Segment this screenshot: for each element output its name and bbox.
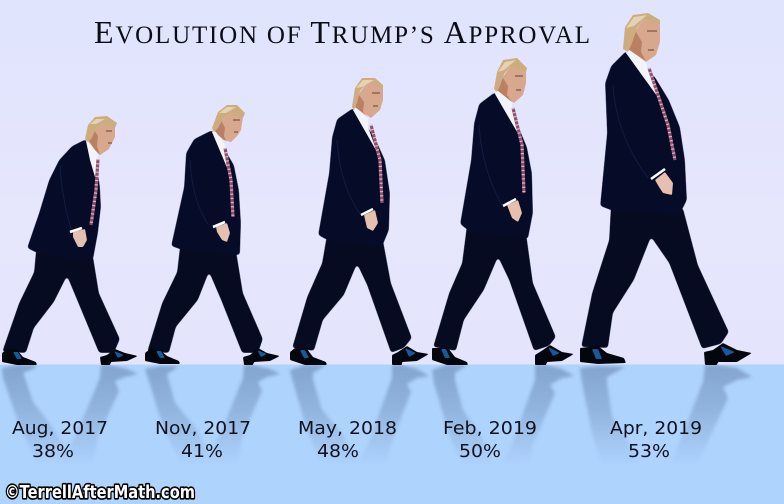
floor reflections of the legs: [1, 365, 752, 450]
label: Nov 2017 41%: [155, 418, 251, 462]
figure: Aug 2017: [2, 116, 138, 365]
label: Apr 2019 53%: Apr, 2019: [610, 418, 702, 439]
label: Apr 2019 53%: 53%: [628, 441, 670, 462]
blue floor: [0, 364, 784, 504]
label: Nov 2017 41%: 41%: [181, 441, 223, 462]
label: Feb 2019 50%: Feb, 2019: [443, 418, 537, 439]
background wall: [0, 0, 784, 365]
figure: Nov 2017: [145, 105, 280, 365]
label: May 2018 48%: [298, 418, 397, 462]
label: Feb 2019 50%: 50%: [459, 441, 501, 462]
label: Aug 2017 38%: Aug, 2017: [12, 418, 108, 439]
title: EVOLUTION OF TRUMP’S APPROVAL: [94, 14, 590, 50]
figure: Apr 2019: [580, 13, 752, 365]
label: Nov 2017 41%: Nov, 2017: [155, 418, 251, 439]
label: May 2018 48%: 48%: [317, 441, 359, 462]
label: May 2018 48%: May, 2018: [298, 418, 397, 439]
figure: May 2018: [290, 78, 429, 365]
label: Aug 2017 38%: 38%: [32, 441, 74, 462]
label: Feb 2019 50%: [443, 418, 537, 462]
label: Aug 2017 38%: [12, 418, 108, 462]
label: Apr 2019 53%: [610, 418, 702, 462]
figure: Feb 2019: [432, 58, 574, 365]
watermark credit: ©TerrellAfterMath.com: [5, 482, 195, 503]
